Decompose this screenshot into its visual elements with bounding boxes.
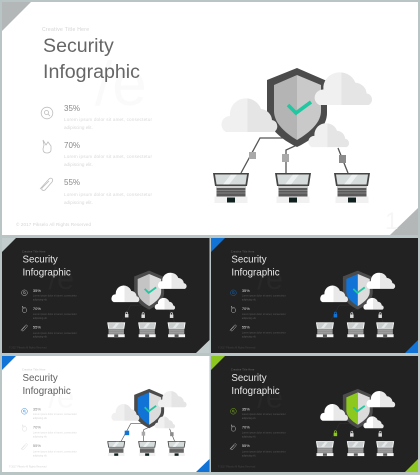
stat: 35% bbox=[41, 104, 152, 130]
panel: light slide, blue accent: Creative Title Here bbox=[22, 368, 46, 371]
panel: dark slide, grey accent: © 2017 Pikselo All Rights Reserved bbox=[9, 347, 47, 350]
connection lines bbox=[241, 138, 348, 173]
stats: adipiscing elit. bbox=[33, 455, 48, 458]
stats bbox=[230, 406, 286, 458]
slide background bbox=[2, 2, 418, 235]
stats: adipiscing elit. bbox=[33, 317, 48, 320]
title: Security bbox=[22, 373, 58, 384]
footer: © 2017 Pikselo All Rights Reserved bbox=[16, 221, 91, 227]
title: Infographic bbox=[231, 268, 280, 279]
stats: 70% bbox=[242, 425, 250, 430]
stats: adipiscing elit. bbox=[242, 336, 257, 339]
stat: 35%: Lorem ipsum dolor sit amet, consectetur bbox=[64, 117, 152, 122]
panel: dark slide, grey accent: Creative Title Here bbox=[22, 250, 46, 253]
stats: adipiscing elit. bbox=[242, 299, 257, 302]
icon: paperclip bbox=[40, 178, 53, 190]
stats: adipiscing elit. bbox=[242, 455, 256, 458]
title: Security bbox=[231, 373, 267, 384]
watermark: /e bbox=[48, 379, 74, 414]
panel: dark slide, blue accent: © 2017 Pikselo All Rights Reserved bbox=[218, 347, 256, 350]
stats: adipiscing elit. bbox=[33, 436, 48, 439]
stats bbox=[21, 288, 77, 339]
stats: adipiscing elit. bbox=[242, 317, 257, 320]
title: Security bbox=[22, 255, 58, 266]
stats: Lorem ipsum dolor sit amet, consectetur bbox=[242, 295, 286, 298]
network illustration bbox=[107, 389, 187, 456]
stat: 70%: Lorem ipsum dolor sit amet, consectetur bbox=[64, 154, 152, 159]
title: Security bbox=[231, 255, 267, 266]
title line 2: Infographic bbox=[43, 61, 140, 83]
slide number watermark: 1 bbox=[385, 208, 398, 235]
stat: 55% bbox=[40, 178, 152, 205]
stat: 70% bbox=[43, 140, 152, 167]
panel: dark slide, blue accent: Creative Title Here bbox=[231, 250, 255, 253]
icon: hand bbox=[43, 140, 51, 153]
stats: Lorem ipsum dolor sit amet, consectetur bbox=[242, 432, 286, 435]
laptops bbox=[213, 173, 370, 203]
stats: 70% bbox=[242, 306, 250, 311]
title: Infographic bbox=[231, 386, 280, 397]
title bbox=[231, 255, 280, 279]
stat: 55%: 55% bbox=[64, 178, 80, 187]
title bbox=[231, 373, 280, 397]
title bbox=[22, 373, 71, 397]
panel: dark slide, blue accent bbox=[211, 238, 418, 353]
network illustration bbox=[316, 271, 395, 337]
panel: light slide, blue accent bbox=[2, 356, 210, 472]
bottom-right corner triangle bbox=[390, 208, 418, 235]
panel: dark slide, green accent: © 2017 Pikselo All Rights Reserved bbox=[218, 466, 256, 469]
eyebrow text: Creative Title Here bbox=[42, 27, 89, 33]
stats: adipiscing elit. bbox=[242, 417, 256, 420]
stats: 55% bbox=[33, 324, 41, 329]
stats: 55% bbox=[242, 443, 250, 448]
panel: light slide, blue accent: © 2017 Pikselo All Rights Reserved bbox=[9, 466, 47, 469]
stats: 35% bbox=[33, 406, 41, 411]
stats: 70% bbox=[33, 306, 41, 311]
stats: 35% bbox=[242, 406, 250, 411]
stat: 55%: adipiscing elit. bbox=[64, 200, 93, 205]
corner triangles bbox=[211, 356, 418, 472]
panel: dark slide, green accent: Creative Title Here bbox=[231, 368, 255, 371]
title: Infographic bbox=[22, 268, 71, 278]
stats: Lorem ipsum dolor sit amet, consectetur bbox=[33, 413, 77, 416]
watermark lettering: /e bbox=[95, 50, 147, 119]
stats: Lorem ipsum dolor sit amet, consectetur bbox=[242, 451, 286, 454]
stat: 70%: 70% bbox=[64, 141, 80, 150]
panel: dark slide, grey accent bbox=[2, 238, 210, 353]
stats: Lorem ipsum dolor sit amet, consectetur bbox=[242, 332, 286, 335]
stats bbox=[21, 406, 77, 458]
stats: adipiscing elit. bbox=[33, 417, 48, 420]
panel: dark slide, green accent bbox=[211, 356, 418, 472]
top-left corner triangle bbox=[2, 2, 31, 31]
network illustration bbox=[107, 271, 187, 337]
network illustration bbox=[316, 389, 395, 456]
panel: main light slide bbox=[2, 2, 418, 235]
shield bbox=[267, 68, 327, 147]
stats: 55% bbox=[33, 443, 41, 448]
stats: adipiscing elit. bbox=[33, 299, 48, 302]
stat: 35%: adipiscing elit. bbox=[64, 125, 93, 130]
icon: search badge bbox=[41, 107, 53, 119]
stats: Lorem ipsum dolor sit amet, consectetur bbox=[33, 451, 77, 454]
stats: adipiscing elit. bbox=[33, 336, 48, 339]
stat: 70%: adipiscing elit. bbox=[64, 162, 93, 167]
stats: adipiscing elit. bbox=[242, 436, 256, 439]
title: Security bbox=[43, 35, 114, 57]
title bbox=[22, 255, 71, 278]
stat: 35%: 35% bbox=[64, 104, 80, 113]
check mark bbox=[288, 102, 311, 113]
corner triangles bbox=[2, 356, 210, 472]
watermark: /e bbox=[257, 261, 283, 296]
stats: Lorem ipsum dolor sit amet, consectetur bbox=[33, 313, 77, 316]
stats: 35% bbox=[33, 288, 41, 293]
stats: 55% bbox=[242, 324, 250, 329]
clouds bbox=[222, 72, 372, 147]
stats: 70% bbox=[33, 425, 41, 430]
network illustration bbox=[213, 68, 372, 203]
stat: 55%: Lorem ipsum dolor sit amet, consectetur bbox=[64, 192, 152, 197]
stats bbox=[230, 288, 286, 339]
stats: Lorem ipsum dolor sit amet, consectetur bbox=[242, 313, 286, 316]
stats: Lorem ipsum dolor sit amet, consectetur bbox=[33, 332, 77, 335]
lock tags bbox=[249, 152, 346, 163]
stats: Lorem ipsum dolor sit amet, consectetur bbox=[242, 413, 286, 416]
stats: Lorem ipsum dolor sit amet, consectetur bbox=[33, 295, 77, 298]
title: Infographic bbox=[22, 386, 71, 397]
watermark: /e bbox=[48, 261, 74, 296]
stats: Lorem ipsum dolor sit amet, consectetur bbox=[33, 432, 77, 435]
watermark: /e bbox=[257, 379, 283, 414]
corner triangles bbox=[211, 238, 418, 353]
stats: 35% bbox=[242, 288, 250, 293]
corner triangles bbox=[2, 238, 210, 353]
